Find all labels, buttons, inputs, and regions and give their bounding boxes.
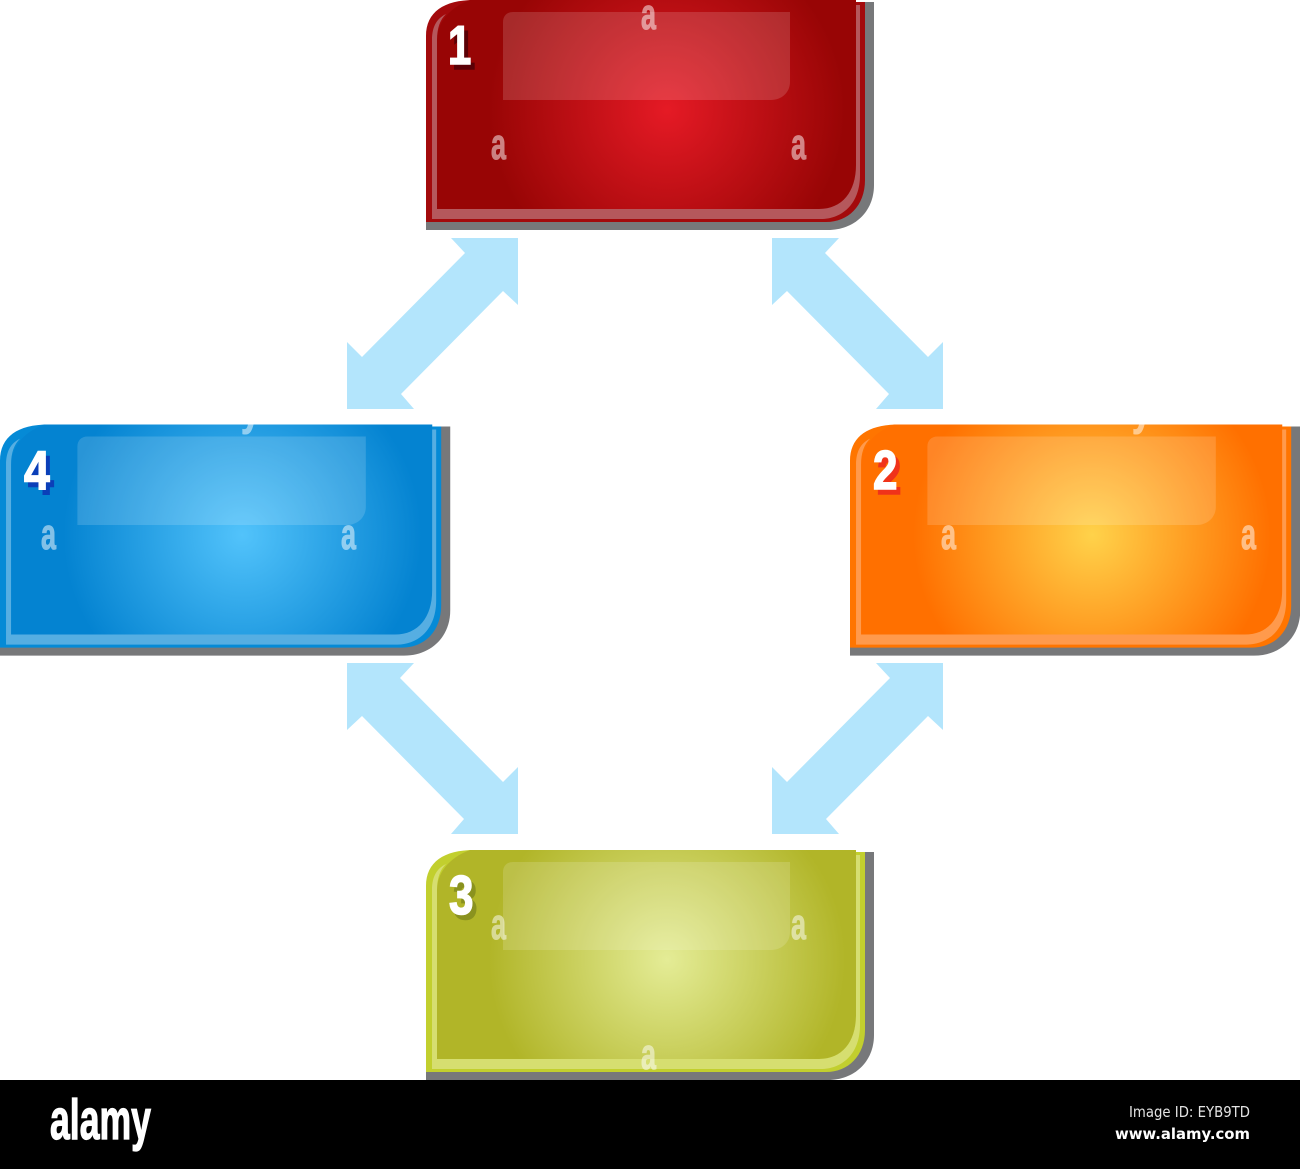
- box 2 glass panel: [927, 437, 1216, 525]
- arrow: between box 1 and box 2: [772, 238, 943, 409]
- watermark glyphs: a: [1241, 510, 1256, 559]
- box 4 shadow: [0, 427, 450, 656]
- arrow: between box 2 and box 3: [772, 663, 943, 834]
- panel: box 4 blue: [0, 424, 450, 656]
- box 4 body: [0, 424, 441, 648]
- box 1 gradient face: [437, 0, 856, 209]
- watermark glyphs: a: [491, 120, 506, 169]
- box 2 shadow: [850, 427, 1300, 656]
- panel: box 1 red: [426, 0, 874, 230]
- box 4 highlight rim: [6, 430, 436, 645]
- box 3 highlight rim: [432, 855, 860, 1069]
- watermark glyphs: a: [341, 510, 356, 559]
- number 1: 1: [452, 21, 475, 81]
- box 3 glass panel: [503, 862, 790, 950]
- number 1: 1: [448, 16, 471, 76]
- box 2 gradient face: [861, 424, 1282, 635]
- box 4 gradient face: [11, 424, 432, 635]
- box 2 body: [850, 424, 1291, 648]
- watermark glyphs: a: [791, 120, 806, 169]
- panel: box 2 orange: [850, 424, 1300, 656]
- number 4: 4: [28, 444, 54, 506]
- number 4: 4: [24, 439, 50, 501]
- number 2: 2: [877, 444, 901, 506]
- box 4 glass panel: [77, 437, 366, 525]
- box 1 body: [426, 0, 865, 222]
- box 3 gradient face: [437, 850, 856, 1059]
- footer bar: [0, 1080, 1300, 1169]
- watermark glyphs: y: [1132, 386, 1151, 435]
- box 3 body: [426, 850, 865, 1072]
- number 2: 2: [873, 439, 897, 501]
- box 2 highlight rim: [856, 430, 1286, 645]
- arrow: between box 1 and box 4: [347, 238, 518, 409]
- watermark glyphs: a: [791, 900, 806, 949]
- footer logo: alamy: [50, 1088, 151, 1152]
- footer url: www.alamy.com: [1115, 1125, 1250, 1143]
- watermark glyphs: a: [41, 510, 56, 559]
- watermark glyphs: a: [941, 510, 956, 559]
- footer image id: Image ID: EYB9TD: [1129, 1103, 1250, 1121]
- watermark glyphs: a: [641, 1030, 656, 1079]
- number 3: 3: [453, 869, 477, 931]
- box 3 shadow: [426, 852, 874, 1080]
- watermark glyphs: a: [491, 900, 506, 949]
- arrow: between box 4 and box 3: [347, 663, 518, 834]
- watermark glyphs: y: [241, 386, 260, 435]
- box 1 highlight rim: [432, 5, 860, 219]
- box 1 shadow: [426, 2, 874, 230]
- number 3: 3: [449, 864, 473, 926]
- panel: box 3 olive: [426, 850, 874, 1080]
- box 1 glass panel: [503, 12, 790, 100]
